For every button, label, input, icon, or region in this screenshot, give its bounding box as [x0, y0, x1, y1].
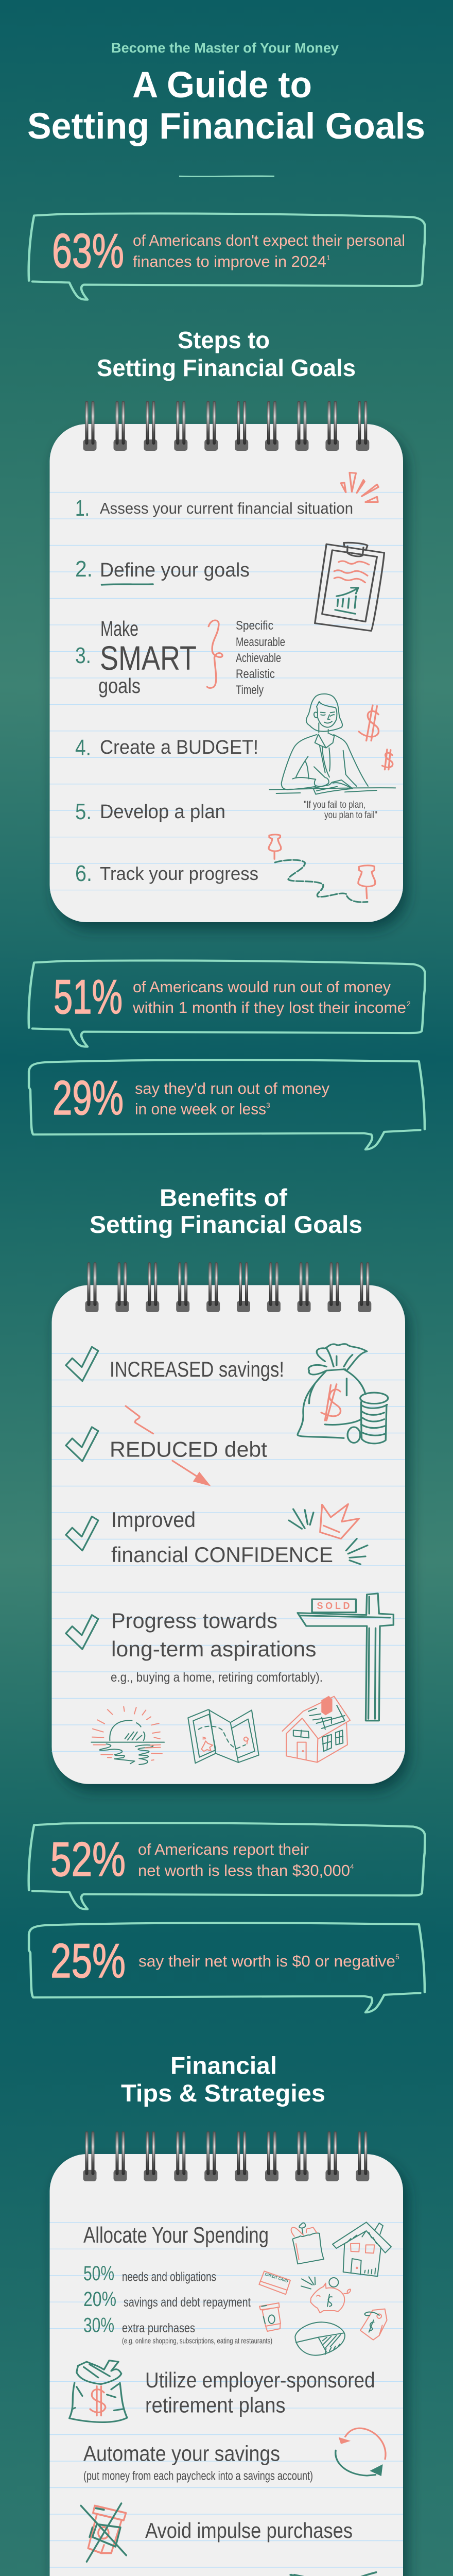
heading: steps: [97, 327, 356, 381]
icon: sparks: [341, 472, 378, 502]
step 5: [75, 799, 225, 824]
tip: allocate spending: 20%: [83, 2288, 116, 2311]
icon: dollar signs: [359, 705, 393, 770]
step 3: goals: [98, 674, 141, 698]
callout: 52%: 52%: [50, 1832, 126, 1886]
callout: 25%: say their net worth is $0 or negative: [138, 1952, 395, 1970]
icon: house with solar panels: [282, 1696, 350, 1762]
heading: benefits: Setting Financial Goals: [90, 1211, 362, 1238]
step 4: 4.: [75, 735, 91, 760]
callout: 63%: 1: [326, 253, 330, 262]
tip: allocate spending: Allocate Your Spending: [83, 2223, 269, 2248]
callout: 29%: [29, 1060, 425, 1149]
benefit: confidence: financial CONFIDENCE: [111, 1543, 333, 1567]
tip: allocate spending: needs and obligations: [122, 2270, 216, 2284]
icon: route with pins: [269, 835, 375, 902]
icon: map: [188, 1709, 259, 1763]
step 3: Realistic: [236, 667, 275, 681]
label: sold: SOLD: [317, 1601, 350, 1611]
callout: 52%: [29, 1823, 425, 1909]
callout: 29%: 3: [266, 1101, 270, 1109]
step 2: Define your goals: [100, 560, 250, 581]
benefit: savings: INCREASED savings!: [110, 1357, 284, 1381]
icon: clipboard: [315, 543, 384, 631]
quote: you plan to fail": [324, 810, 377, 821]
step 2: 2.: [75, 556, 93, 582]
tip: automate savings: (put money from each paycheck into a savings account): [83, 2469, 313, 2483]
step 3: 3.: [75, 643, 91, 668]
callout: 52%: 4: [350, 1862, 354, 1871]
tip: retirement plans: retirement plans: [145, 2393, 285, 2417]
icon: sunset: [91, 1707, 164, 1765]
heading: tips: [121, 2052, 325, 2107]
tip: automate savings: Automate your savings: [83, 2441, 280, 2466]
heading: benefits: Benefits of: [160, 1184, 287, 1211]
step 3: SMART: [100, 639, 197, 677]
callout: 63%: 63%: [52, 224, 124, 278]
step 3: Achievable: [236, 651, 281, 665]
tip: retirement plans: Utilize employer-sponsored: [145, 2368, 375, 2392]
illustration: woman planning: [269, 694, 395, 794]
callout: 51%: within 1 month if they lost their income: [132, 998, 406, 1016]
callout: 25%: [29, 1923, 425, 2012]
callout: 29%: in one week or less: [135, 1100, 266, 1118]
callout: 25%: 25%: [50, 1934, 126, 1988]
step 3: [75, 617, 285, 698]
tip: allocate spending: [83, 2223, 272, 2345]
benefit: confidence: [111, 1507, 333, 1567]
header: [27, 40, 425, 176]
callout: 63%: [29, 213, 425, 300]
tip: allocate spending: 50%: [83, 2262, 114, 2285]
tip: avoid impulse: Avoid impulse purchases: [145, 2518, 353, 2543]
callout: 29%: 29%: [53, 1071, 124, 1125]
icon: crossed-out cup: [81, 2503, 126, 2562]
icon: check marks: [66, 1347, 98, 1649]
icon: cycle arrows: [336, 2428, 386, 2476]
callout: 51%: 2: [407, 999, 411, 1008]
tip: allocate spending: (e.g. online shopping, subscriptions, eating at restaurants): [122, 2337, 272, 2345]
callout: 51%: of Americans would run out of money: [133, 978, 391, 996]
tip: automate savings: [83, 2441, 313, 2483]
quote: [304, 800, 377, 821]
benefit: confidence: Improved: [111, 1507, 196, 1532]
step 6: Track your progress: [100, 863, 258, 884]
eyebrow: Become the Master of Your Money: [111, 40, 339, 56]
callout: 63%: finances to improve in 2024: [133, 252, 326, 270]
step 1: Assess your current financial situation: [100, 499, 353, 517]
step 1: [75, 496, 353, 521]
step 3: Timely: [236, 683, 264, 697]
step 3: Measurable: [236, 635, 285, 649]
benefit: aspirations: e.g., buying a home, retiring comfortably).: [111, 1670, 323, 1685]
step 3: Specific: [236, 619, 273, 633]
tip: retirement plans: [145, 2368, 375, 2417]
callout: 51%: 51%: [54, 970, 123, 1024]
icon: handshake: [277, 2572, 384, 2576]
label: credit card: CREDIT CARD: [264, 2272, 289, 2284]
title: Setting Financial Goals: [27, 106, 425, 147]
icons: grocery bag, house, card, piggy bank, cup, pie, tag: [259, 2222, 391, 2355]
tip: allocate spending: extra purchases: [122, 2321, 195, 2335]
quote: "If you fail to plan,: [304, 800, 365, 810]
step 3: Make: [100, 617, 138, 640]
spiral binding: [85, 1262, 371, 1312]
callout: 51%: [29, 960, 425, 1047]
benefit: aspirations: [111, 1608, 323, 1685]
spiral binding: [83, 401, 369, 451]
title: A Guide to: [132, 65, 312, 106]
step 2: [75, 556, 250, 585]
spiral binding: [83, 2131, 369, 2181]
step 4: Create a BUDGET!: [100, 737, 258, 758]
title: [27, 65, 425, 147]
callout: 25%: 5: [395, 1953, 399, 1961]
heading: tips: Tips & Strategies: [121, 2079, 325, 2107]
panel: benefits notebook: [51, 1262, 405, 1784]
heading: tips: Financial: [170, 2052, 277, 2079]
tip: allocate spending: savings and debt repayment: [124, 2295, 251, 2310]
callout: 29%: say they'd run out of money: [135, 1079, 329, 1097]
panel: tips notebook: [49, 2131, 403, 2576]
heading: benefits: [90, 1184, 362, 1238]
icon: sold sign: [298, 1594, 393, 1721]
benefit: aspirations: Progress towards: [111, 1608, 277, 1633]
icon: money bag and coins: [298, 1344, 388, 1444]
callout: 52%: net worth is less than $30,000: [138, 1861, 350, 1879]
panel: steps notebook: [49, 401, 403, 922]
heading: steps: Setting Financial Goals: [97, 354, 356, 381]
icon: money bag: [69, 2361, 127, 2422]
step 1: 1.: [75, 496, 90, 521]
callout: 63%: of Americans don't expect their personal: [133, 231, 405, 249]
heading: steps: Steps to: [178, 327, 270, 353]
step 5: 5.: [75, 799, 92, 824]
benefit: aspirations: long-term aspirations: [111, 1637, 316, 1661]
benefit: debt: REDUCED debt: [110, 1437, 267, 1461]
callout: 52%: of Americans report their: [138, 1840, 309, 1858]
tip: allocate spending: 30%: [83, 2314, 114, 2337]
step 6: 6.: [75, 861, 92, 886]
icon: crown: [289, 1504, 368, 1564]
icon: down arrow: [126, 1406, 211, 1486]
step 5: Develop a plan: [100, 801, 225, 823]
